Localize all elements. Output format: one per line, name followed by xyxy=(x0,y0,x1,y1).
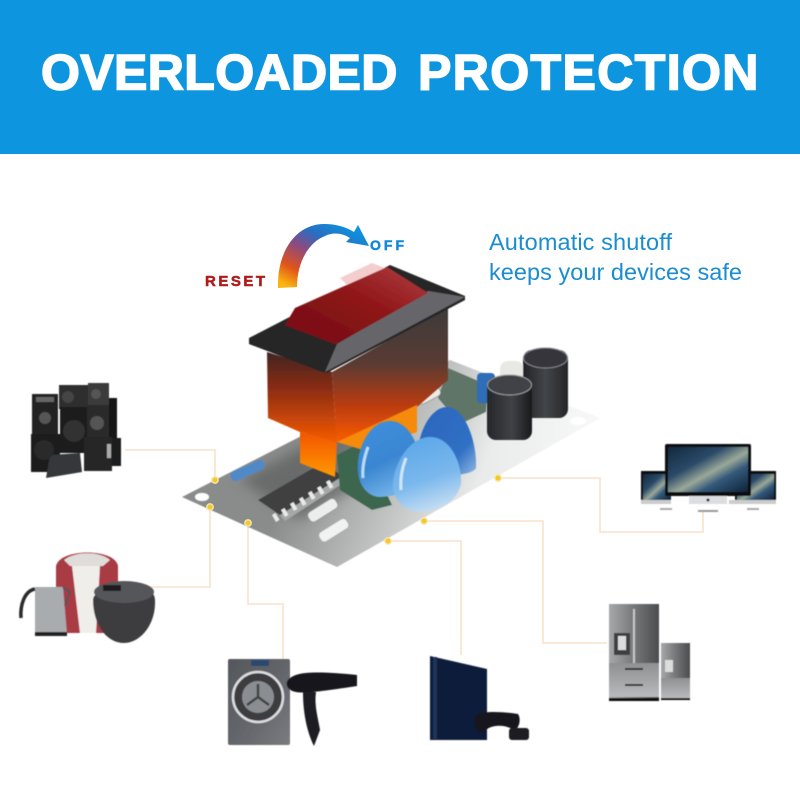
icon: kettle and cookers xyxy=(21,552,155,643)
yellow connection dots xyxy=(207,475,501,544)
icon: speakers xyxy=(31,383,121,478)
switch body left face xyxy=(267,352,337,442)
reset label: RESET xyxy=(205,273,265,290)
caption xyxy=(489,229,742,285)
icon: hair dryer xyxy=(287,673,357,746)
switch body right face xyxy=(332,307,448,442)
green circuit area xyxy=(337,442,392,510)
blue resistor xyxy=(229,459,266,483)
caption: Automatic shutoff xyxy=(489,229,672,255)
title: OVERLOADED xyxy=(41,44,412,100)
bezel xyxy=(249,265,465,373)
connector lines with yellow dots xyxy=(125,450,703,660)
white resistors xyxy=(306,497,339,523)
red rocker xyxy=(285,267,428,344)
capacitors xyxy=(477,348,568,440)
integrated circuit chip xyxy=(258,463,343,515)
circuit board xyxy=(182,360,600,567)
ghost reset position xyxy=(340,263,385,290)
off label: OFF xyxy=(370,237,404,253)
header banner xyxy=(0,0,800,154)
icon: reset arrow xyxy=(278,224,369,288)
caption: keeps your devices safe xyxy=(489,259,742,285)
icon: washing machine xyxy=(228,659,290,745)
icon: refrigerators xyxy=(609,604,690,701)
icon: computer monitors xyxy=(641,444,776,512)
switch prongs xyxy=(300,432,337,477)
icon: game console xyxy=(430,656,529,740)
blue capacitor discs xyxy=(358,407,476,512)
title: PROTECTION xyxy=(418,44,760,100)
shadow under switch xyxy=(240,425,420,520)
rocker switch xyxy=(249,263,465,477)
